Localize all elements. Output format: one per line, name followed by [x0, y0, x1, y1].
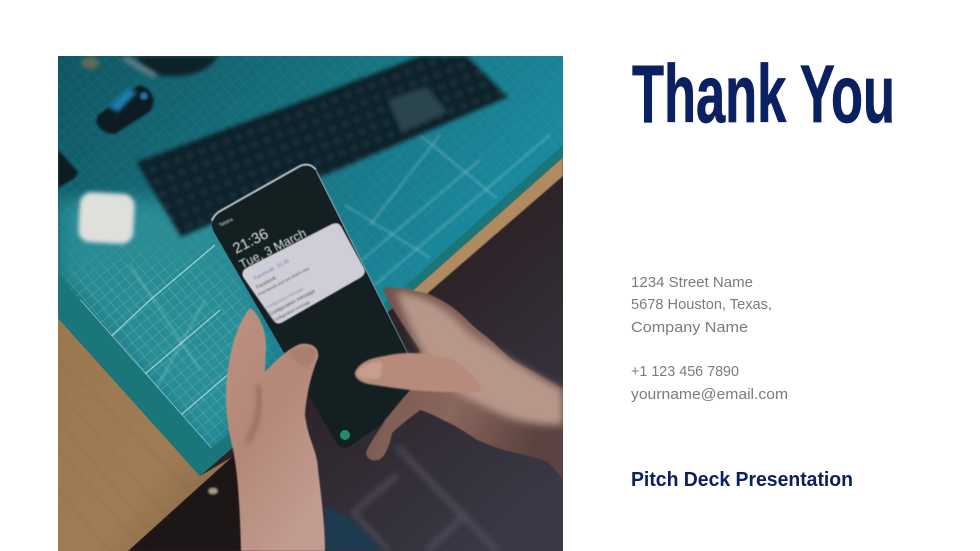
teal cutting mat: [40, 56, 563, 486]
lock screen clock and date: 21:36: [230, 225, 271, 258]
notification card: Facebook · 21:36: [253, 258, 290, 282]
presentation name: Pitch Deck Presentation: [631, 469, 853, 491]
blurred objects on mat: [58, 56, 218, 244]
notification card: Configuration message: [265, 286, 304, 310]
blue cartridge: [96, 86, 154, 134]
lock screen clock and date: [218, 217, 309, 272]
slide: [58, 56, 892, 551]
lock screen clock and date: Tue, 3 March: [237, 226, 309, 272]
smartphone: [210, 162, 410, 448]
left hand: [226, 308, 325, 551]
contact block: yourname@email.com: [631, 386, 788, 403]
address block: [631, 274, 772, 336]
contact block: [631, 363, 788, 403]
address block: 5678 Houston, Texas,: [631, 296, 772, 313]
address block: Company Name: [631, 319, 748, 336]
contact block: +1 123 456 7890: [631, 363, 739, 380]
dark block left: [58, 150, 78, 188]
lock screen clock and date: Telstra: [218, 217, 234, 229]
wooden table: [58, 157, 563, 551]
notification card: Configuration message: [268, 288, 317, 318]
dark tiled floor: [58, 157, 563, 551]
notification card: Find friends and see what's new: [257, 266, 310, 297]
photo: hands holding smartphone over cutting mat: [40, 56, 563, 551]
dark object top: [135, 56, 218, 76]
address block: 1234 Street Name: [631, 274, 753, 291]
white earbuds case: [78, 192, 135, 244]
notification card: Facebook: [255, 275, 278, 291]
keyboard: [136, 56, 508, 237]
notification card: [242, 223, 365, 324]
notification card: Configuration message: [272, 299, 311, 323]
right hand: [355, 287, 563, 480]
call button: [340, 430, 350, 440]
